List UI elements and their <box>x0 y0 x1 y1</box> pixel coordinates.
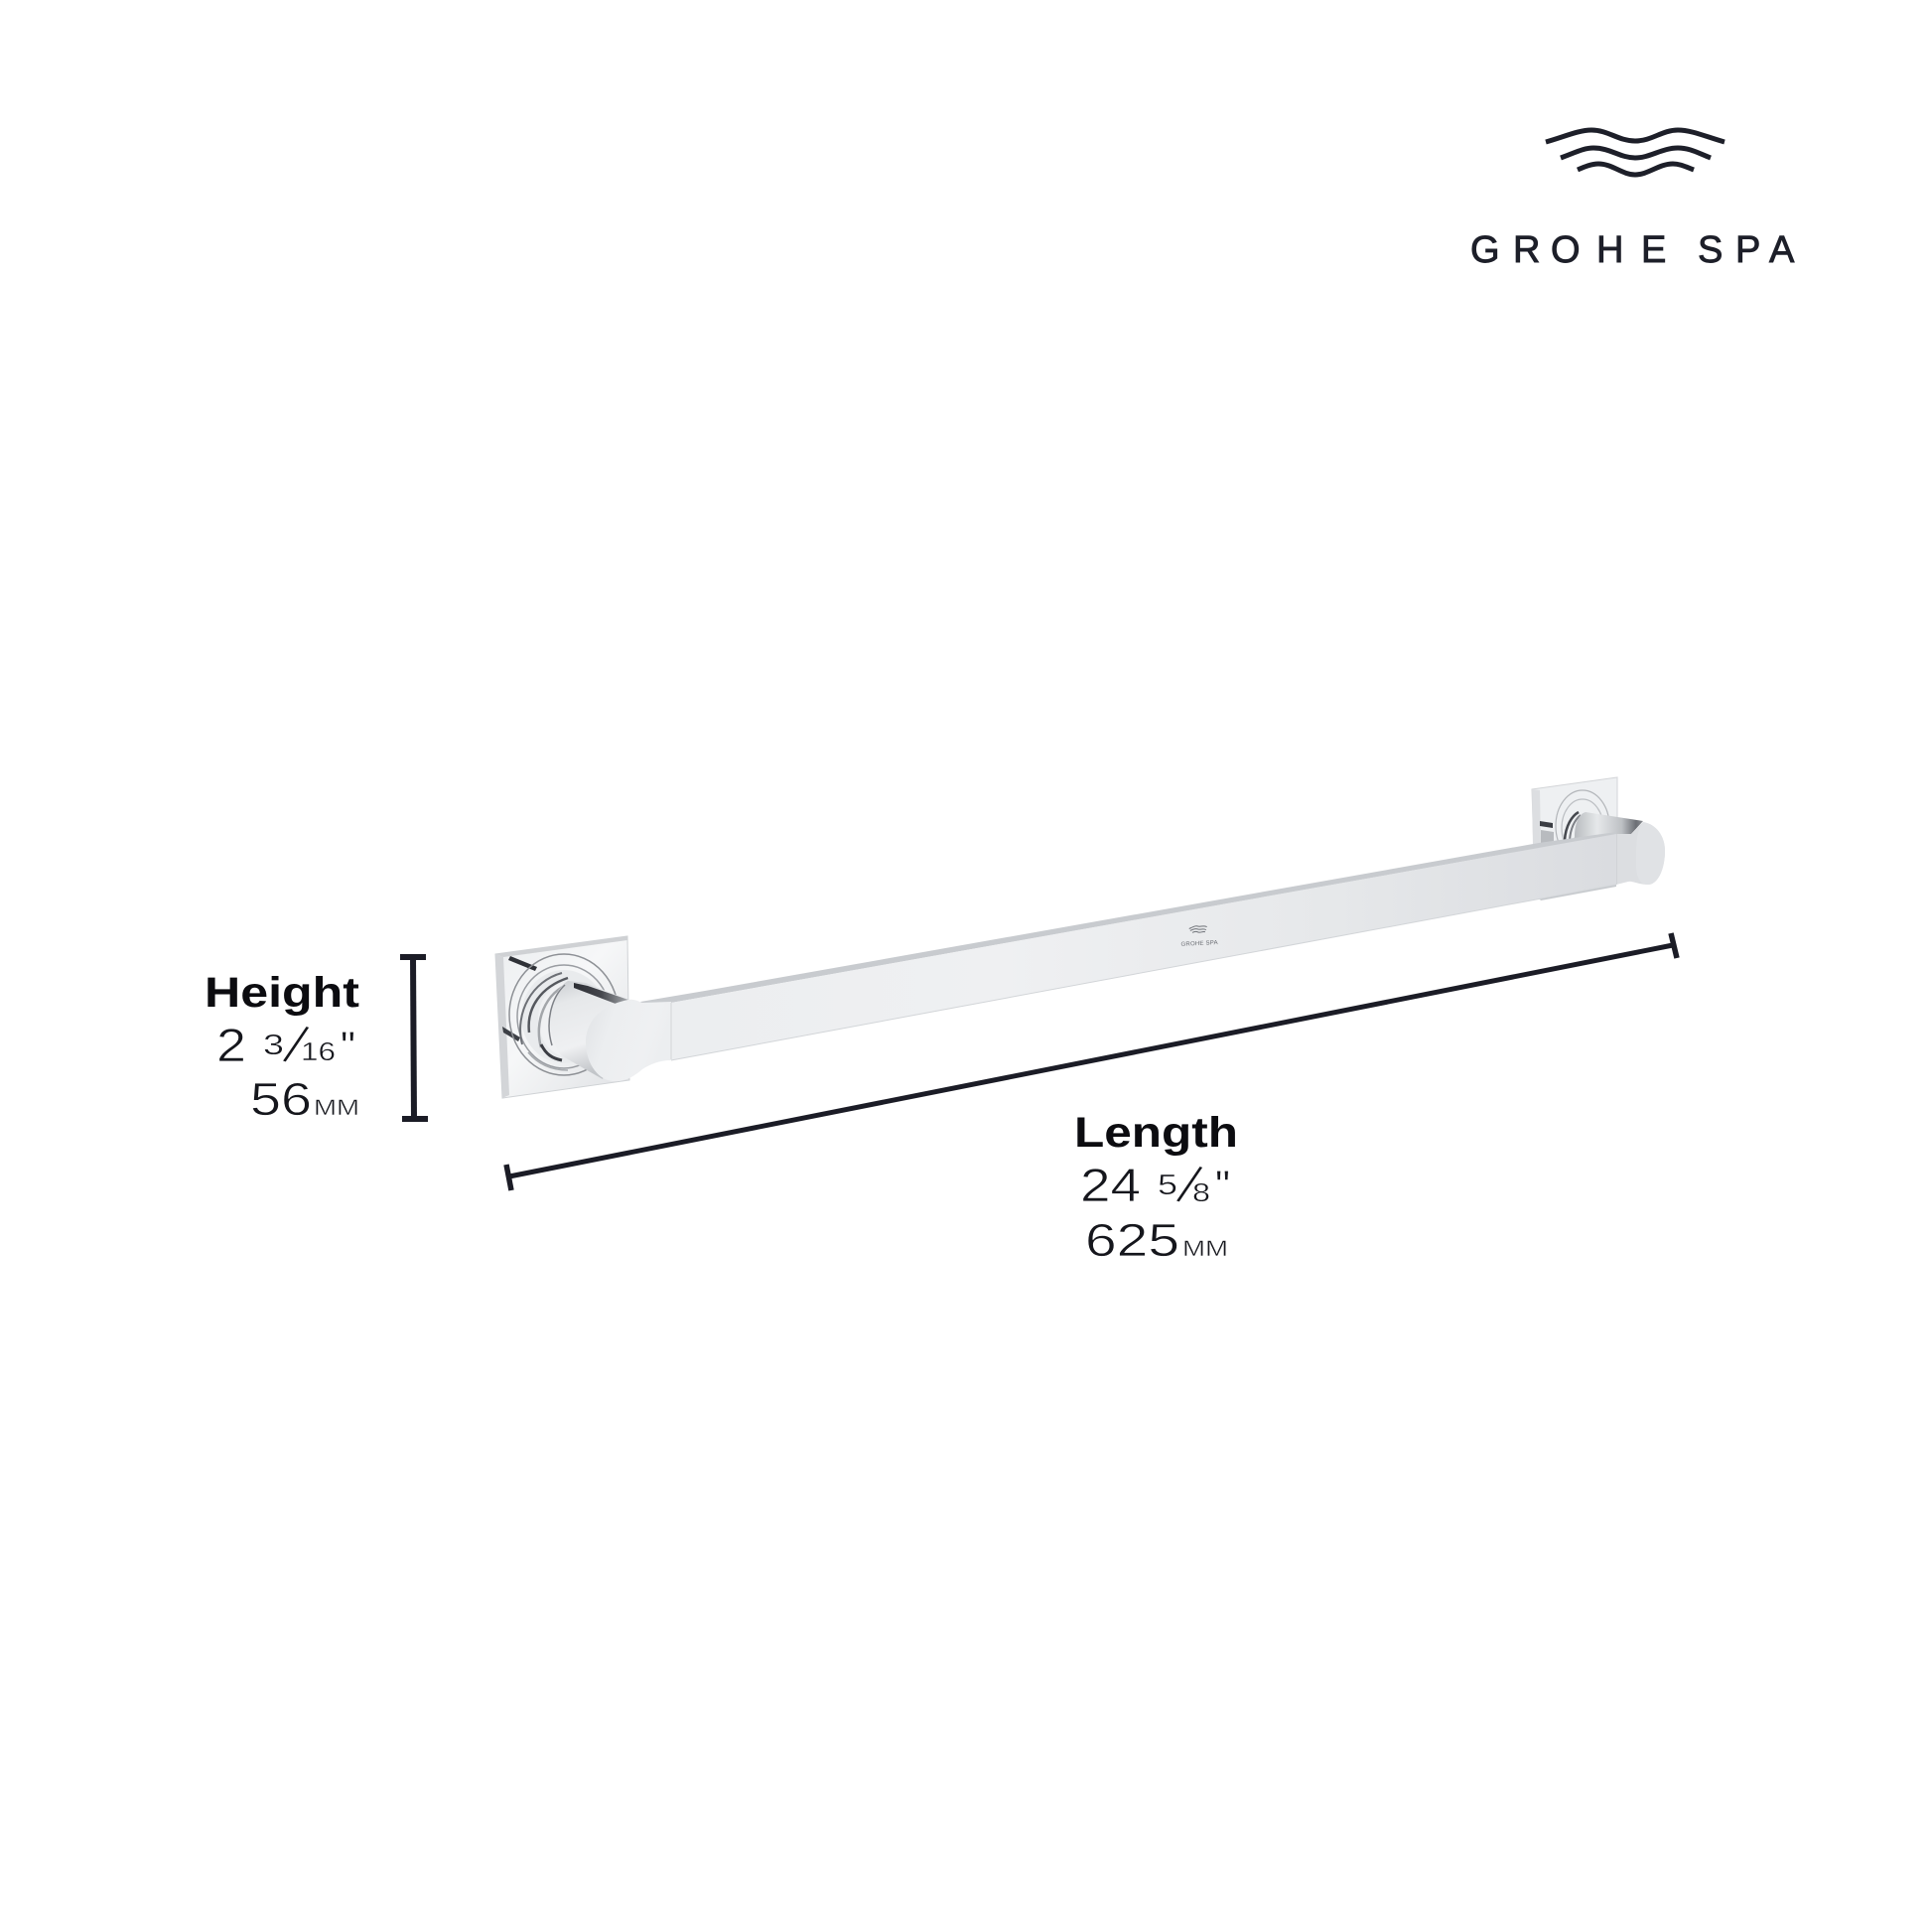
bar seam <box>670 1003 672 1059</box>
bar engraved logo: GROHE SPA <box>1180 940 1218 948</box>
length in inches: " <box>1215 1162 1230 1208</box>
height dimension marker <box>400 957 428 1119</box>
length in inches: 5 <box>1158 1170 1177 1201</box>
left wall plate <box>495 936 629 1098</box>
length in inches <box>1080 1153 1230 1218</box>
height in millimetres: MM <box>314 1095 359 1120</box>
length in inches: 8 <box>1192 1177 1210 1207</box>
bar engraved logo <box>1180 925 1218 948</box>
bar front face <box>671 834 1616 1060</box>
length label <box>1074 1109 1238 1266</box>
height in inches: 16 <box>301 1036 336 1066</box>
height in inches: " <box>341 1023 355 1069</box>
length in millimetres: MM <box>1182 1236 1228 1261</box>
height label <box>205 969 359 1125</box>
height in inches: 3 <box>263 1030 284 1061</box>
left end cap <box>586 1000 671 1081</box>
logo: GROHE SPA <box>1470 130 1795 271</box>
length in millimetres <box>1085 1214 1228 1266</box>
height in millimetres: 56 <box>250 1073 312 1125</box>
heading: Length: Length <box>1074 1109 1238 1157</box>
right end cap <box>1616 822 1665 885</box>
heading: Height: Height <box>205 969 359 1017</box>
right wall mount <box>1532 777 1643 862</box>
length dimension marker <box>506 933 1677 1190</box>
icon: water waves <box>1546 130 1725 175</box>
height in inches: / <box>278 1013 314 1078</box>
bar bottom edge <box>671 885 1616 1060</box>
height in inches: 2 <box>216 1019 246 1071</box>
length in inches: / <box>1172 1153 1207 1218</box>
length in millimetres: 625 <box>1085 1214 1179 1266</box>
logo wordmark: GROHE SPA <box>1470 229 1795 271</box>
height in inches <box>216 1013 355 1078</box>
length in inches: 24 <box>1080 1159 1141 1211</box>
product: towel bar <box>495 777 1665 1098</box>
lower mounting lip <box>1537 885 1616 900</box>
bar top edge <box>640 832 1616 1007</box>
height in millimetres <box>250 1073 359 1125</box>
